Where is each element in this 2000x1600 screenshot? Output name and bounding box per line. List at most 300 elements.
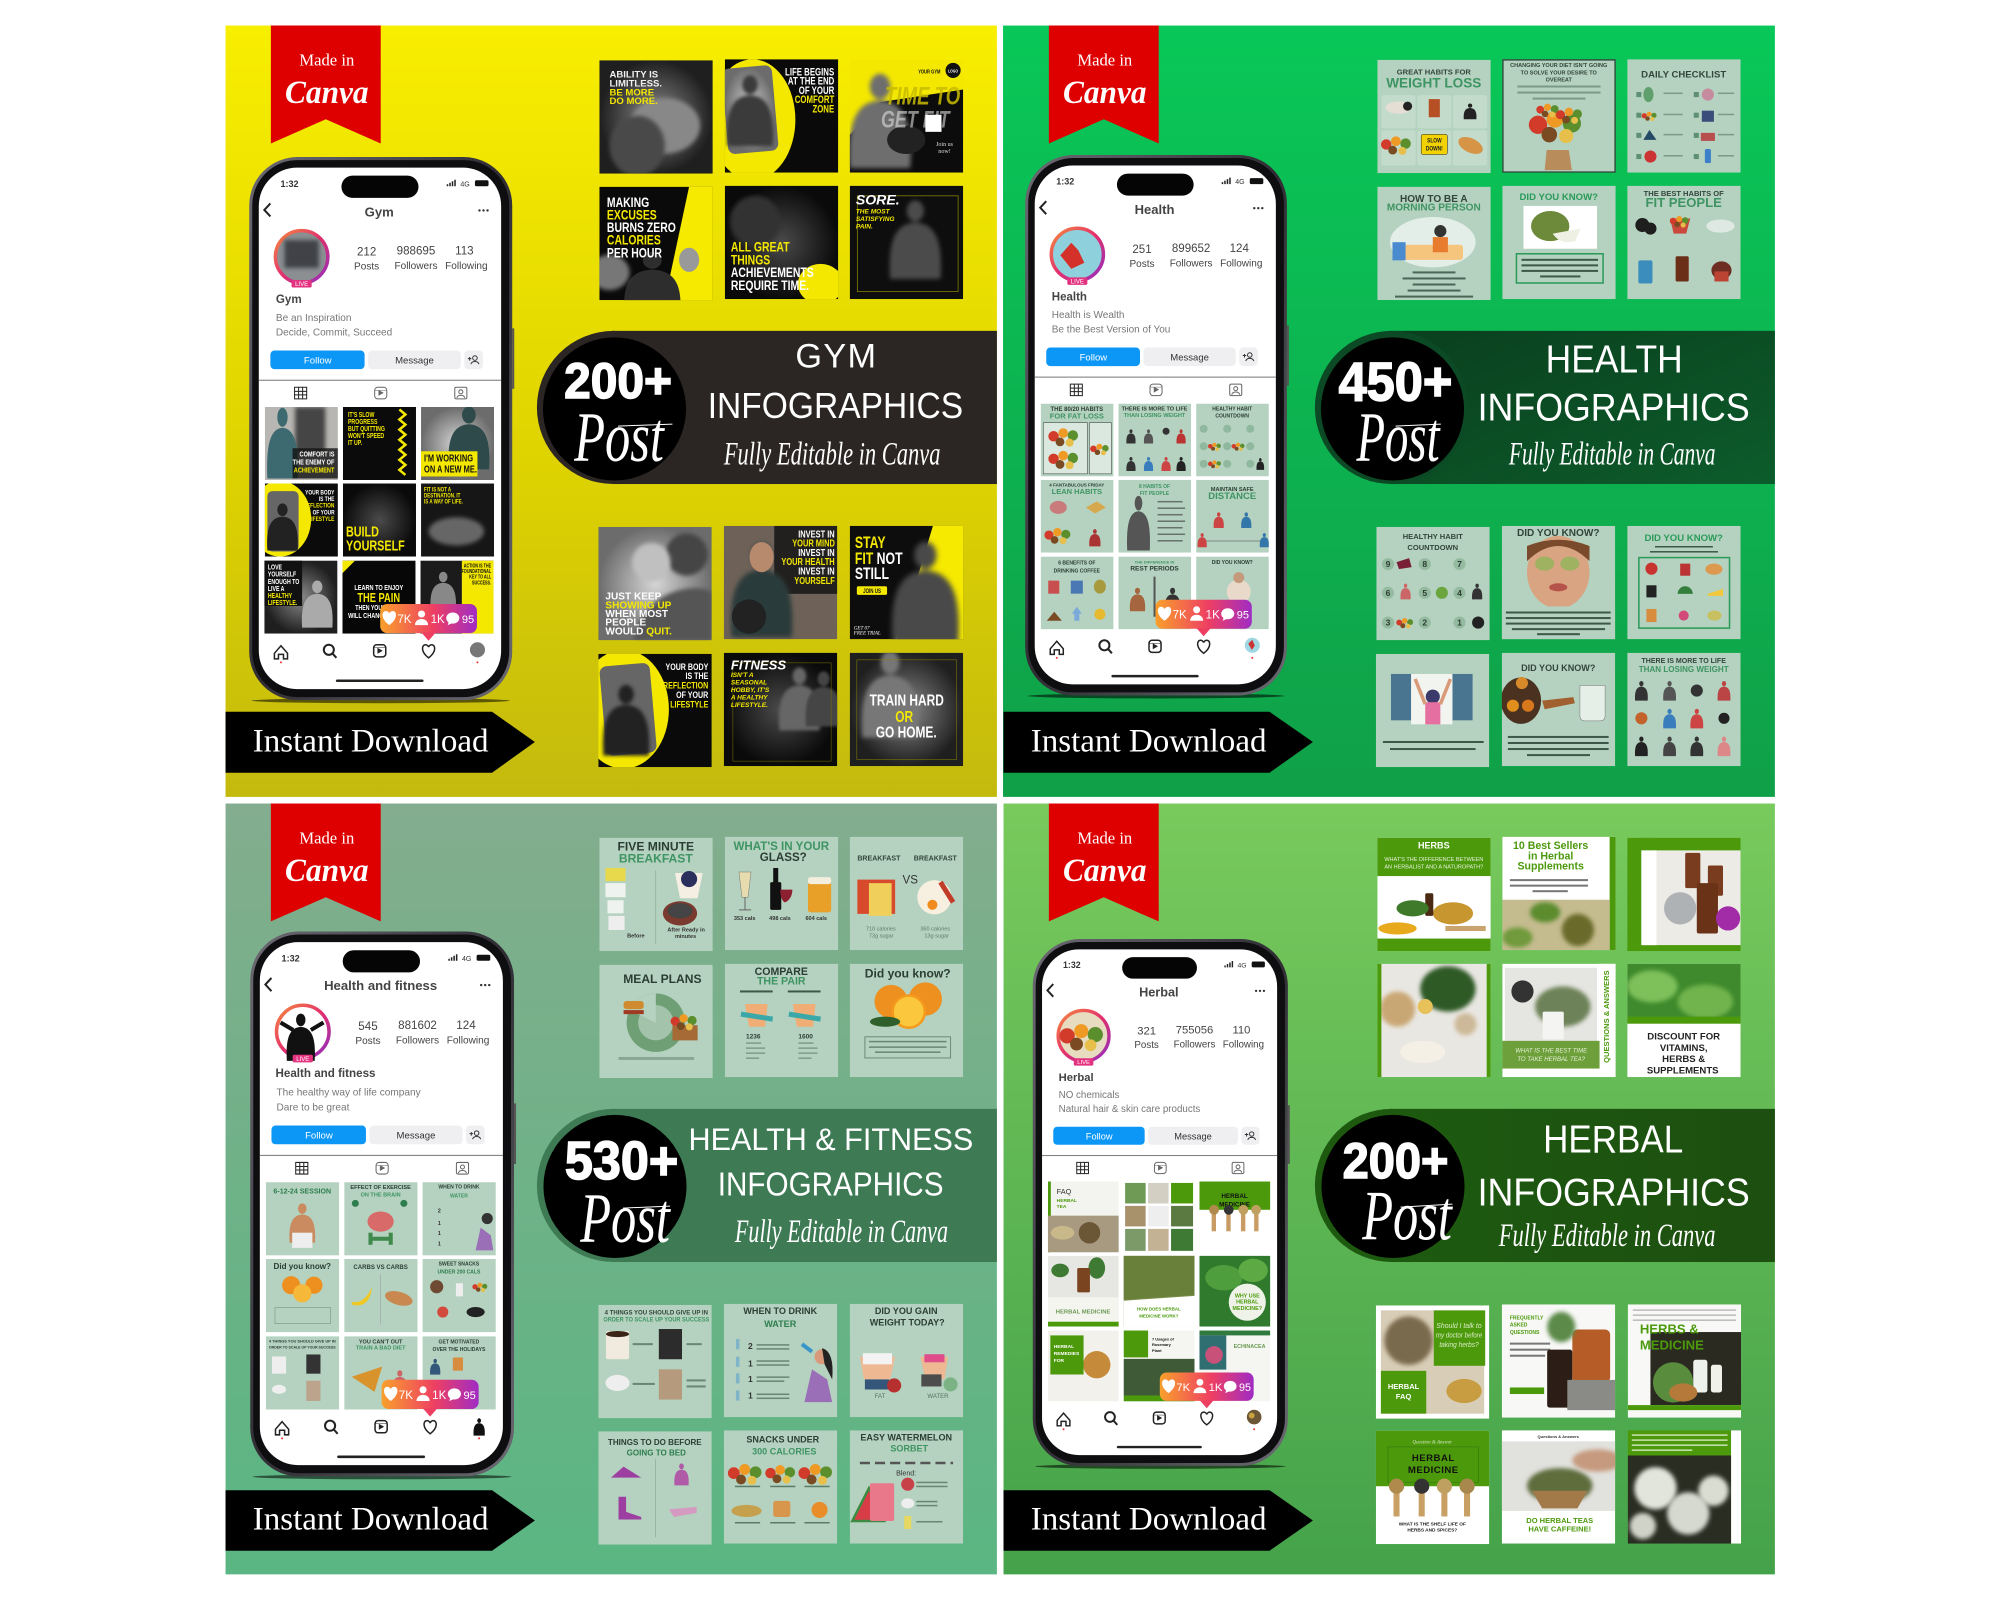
post: breakfast vs breakfast: VS: [903, 875, 918, 887]
post: herbs naturopath: WHAT'S THE DIFFERENCE BETWEEN: [1384, 857, 1483, 863]
ribbon: made in canva: [1049, 804, 1159, 921]
post: whats in your glass: GLASS?: [760, 852, 807, 864]
post count: Post: [1356, 399, 1441, 477]
post count: Post: [580, 1180, 671, 1258]
post grid: Did you know?: [274, 1262, 331, 1271]
post: invest in: INVEST IN: [798, 547, 835, 558]
post: 4 things: 4 THINGS YOU SHOULD GIVE UP IN: [605, 1310, 708, 1316]
post: just keep showing up: SHOWING UP: [605, 600, 672, 611]
post: when to drink water: WHEN TO DRINK: [743, 1306, 818, 1316]
post: discount: [1627, 964, 1741, 1077]
post: stay fit not still: FIT NOT: [855, 550, 903, 569]
post: waking up early: [1376, 654, 1489, 767]
post grid: [1048, 1181, 1270, 1401]
profile buttons: Message: [397, 1131, 435, 1142]
avatar: [277, 1005, 329, 1063]
arrow: instant download: [226, 712, 535, 773]
post: when to drink water: [724, 1304, 837, 1417]
post: questions and answers: WHAT IS THE BEST TIME: [1515, 1048, 1588, 1054]
post grid: COUNTDOWN: [1215, 414, 1249, 420]
post: making excuses: BURNS ZERO: [607, 220, 676, 236]
profile nav avatar: [1245, 638, 1260, 653]
post grid: LEAN HABITS: [1052, 487, 1102, 496]
panel background: [226, 804, 997, 1574]
post: did you gain weight: FAT: [875, 1394, 886, 1400]
post: invest in: INVEST IN: [798, 528, 835, 540]
profile stats: [1129, 243, 1262, 270]
ribbon: made in canva: Made in: [1077, 828, 1133, 847]
post: things to do before bed: GOING TO BED: [627, 1448, 686, 1457]
profile buttons: Message: [1174, 1131, 1212, 1141]
notification bubble: [1156, 600, 1252, 636]
post: herbal medicine spoons: Question & Answer: [1413, 1440, 1452, 1445]
profile buttons: Message: [1170, 353, 1209, 364]
post: discount: HERBS &: [1662, 1054, 1705, 1065]
profile bio: Be the Best Version of You: [1052, 324, 1170, 335]
banner title: Fully Editable in Canva: [1508, 435, 1715, 472]
post grid: IT UP.: [348, 440, 362, 448]
post: life begins: [724, 59, 838, 173]
post: did you gain weight: DID YOU GAIN: [875, 1306, 938, 1316]
post: changing your diet: TO SOLVE YOUR DESIRE TO: [1521, 70, 1598, 76]
profile bio: Health: [1052, 291, 1087, 303]
post: just keep showing up: WHEN MOST: [605, 609, 669, 620]
post grid: BUT QUITTING: [348, 425, 385, 433]
post: all great things: REQUIRE TIME.: [731, 278, 809, 293]
profile stats: Followers: [394, 261, 438, 272]
post: things to do before bed: THINGS TO DO BEFORE: [608, 1438, 702, 1447]
notification bubble: 95: [1239, 1382, 1251, 1394]
post grid: [266, 1182, 496, 1410]
panel background: [1004, 804, 1775, 1574]
post: time to get fit: TIME TO: [885, 82, 960, 110]
post grid: MAINTAIN SAFE: [1211, 487, 1254, 493]
post: time to get fit: [849, 59, 963, 173]
post: 10 best sellers: Supplements: [1517, 861, 1584, 873]
post: stay fit not still: STILL: [855, 566, 889, 584]
profile stats: Following: [445, 261, 488, 272]
profile stats: Following: [447, 1036, 489, 1047]
post grid: IS THE: [319, 497, 335, 503]
post: all great things: ALL GREAT: [731, 239, 790, 255]
post grid: KEY TO ALL: [469, 574, 491, 580]
post: your body: OF YOUR: [676, 689, 708, 700]
phone mockup: health profile: [1025, 155, 1289, 698]
post grid: DISTANCE: [1208, 491, 1256, 502]
post: healthy habit countdown: 5: [1422, 588, 1427, 598]
post grid: DID YOU KNOW?: [1212, 560, 1253, 566]
post: making excuses: [599, 186, 713, 300]
post: 10 best sellers: 10 Best Sellers: [1513, 840, 1588, 852]
post grid: 6-12-24 SESSION: [273, 1188, 331, 1195]
post: herbal faq: HERBAL: [1388, 1382, 1420, 1391]
banner title: INFOGRAPHICS: [1478, 1171, 1750, 1215]
profile bio: Gym: [276, 294, 302, 306]
banner title: INFOGRAPHICS: [708, 385, 963, 426]
profile buttons: [304, 356, 434, 367]
post: train hard: TRAIN HARD: [870, 692, 944, 710]
post: frequently asked questions: QUESTIONS: [1510, 1330, 1540, 1336]
post: discount: DISCOUNT FOR: [1647, 1031, 1720, 1042]
post: healthy habit countdown: 3: [1386, 618, 1391, 628]
profile stats: Posts: [354, 261, 379, 272]
post: 10 best sellers: [1502, 837, 1616, 950]
post: healthy habit countdown: [1376, 527, 1490, 640]
post: morning person: [1377, 187, 1491, 300]
post grid: I'M WORKING: [424, 452, 473, 464]
panel background: [1003, 26, 1775, 797]
post grid: CARBS VS CARBS: [353, 1265, 408, 1271]
post grid: HOW DOES HERBAL: [1137, 1306, 1181, 1311]
ribbon: made in canva: [271, 804, 381, 921]
post: healthy habit countdown: 4: [1457, 588, 1462, 598]
post grid: LIFESTYLE: [308, 516, 335, 523]
post: great habits for weight loss: GREAT HABITS FOR: [1397, 67, 1471, 76]
banner title: Fully Editable in Canva: [734, 1213, 948, 1250]
ribbon: made in canva: [1049, 26, 1159, 143]
post: breakfast vs breakfast: 13g sugar: [924, 934, 949, 940]
post grid: ECHINACEA: [1234, 1344, 1266, 1350]
post count: [564, 352, 672, 477]
post grid: FOR FAT LOSS: [1050, 412, 1104, 421]
profile buttons: [1086, 1131, 1212, 1141]
post: herbs naturopath: HERBS: [1418, 840, 1450, 850]
phone mockup: health profile: 1:32: [1056, 177, 1074, 187]
post: five minute breakfast: minutes: [675, 934, 696, 940]
post: questions and answers: TO TAKE HERBAL TEA?: [1517, 1057, 1586, 1063]
profile stats: 321: [1137, 1025, 1156, 1037]
post: 4 things: ORDER TO SCALE UP YOUR SUCCESS: [603, 1317, 709, 1323]
profile stats: Followers: [1170, 258, 1213, 269]
post: your body: [598, 654, 712, 768]
post: healthy habit countdown: 7: [1457, 559, 1462, 569]
post: five minute breakfast: Before: [627, 934, 645, 940]
profile stats: [1134, 1024, 1264, 1051]
profile bio: [276, 294, 392, 338]
post: herbs naturopath: [1377, 838, 1491, 951]
post: great habits for weight loss: [1377, 60, 1491, 173]
profile stats: 124: [456, 1019, 476, 1032]
post grid: SWEET SNACKS: [439, 1262, 480, 1268]
post: discount: SUPPLEMENTS: [1647, 1066, 1719, 1077]
profile bio: NO chemicals: [1059, 1090, 1120, 1101]
phone mockup: gym profile: 4G: [460, 181, 470, 188]
post grid: THE 80/20 HABITS: [1050, 407, 1103, 413]
banner title: [708, 338, 963, 472]
post: best habits of fit people: FIT PEOPLE: [1646, 195, 1722, 210]
profile stats: 113: [455, 245, 474, 257]
profile stats: Following: [1220, 258, 1262, 269]
post: watermelon sorbet: EASY WATERMELON: [860, 1432, 952, 1442]
post: life begins: ZONE: [812, 104, 834, 115]
profile stats: Followers: [1174, 1040, 1216, 1051]
profile buttons: Follow: [304, 356, 332, 367]
avatar: LIVE: [296, 1057, 309, 1063]
post: your body: REFLECTION: [663, 679, 708, 691]
phone mockup: herbal profile: Herbal: [1139, 986, 1179, 1000]
post: changing your diet: [1502, 59, 1616, 173]
avatar: LIVE: [1077, 1060, 1090, 1066]
post: watermelon sorbet: SORBET: [890, 1443, 929, 1453]
post: daily checklist: [1627, 59, 1741, 173]
post grid: LIFESTYLE.: [268, 599, 298, 607]
ribbon: made in canva: Made in: [299, 828, 355, 847]
post: questions and answers: QUESTIONS & ANSWERS: [1602, 970, 1611, 1063]
post grid: 4 THINGS YOU SHOULD GIVE UP IN: [269, 1339, 336, 1343]
phone mockup: gym profile: Gym: [365, 204, 394, 219]
panel: health infographics: [1003, 26, 1775, 797]
post: life begins: OF YOUR: [799, 85, 834, 96]
post grid: WILL CHANGE: [348, 612, 388, 620]
post grid: IT'S SLOW: [348, 411, 375, 419]
post: watermelon sorbet: Blend:: [896, 1471, 916, 1478]
post: healthy habit countdown: COUNTDOWN: [1407, 543, 1458, 552]
post grid: 8 HABITS OF: [1139, 484, 1170, 490]
post: making excuses: CALORIES: [607, 232, 661, 248]
profile stats: 988695: [397, 245, 435, 257]
post grid: WON'T SPEED: [348, 432, 385, 440]
post grid: THE ENEMY OF: [293, 459, 334, 467]
profile bio: Health and fitness: [275, 1067, 375, 1080]
profile stats: [355, 1019, 489, 1047]
post: whats in your glass: 353 cals: [734, 916, 755, 922]
post grid: ACTION IS THE: [464, 563, 491, 569]
banner: 530+ post health and fitness infographics: [537, 1109, 997, 1262]
profile stats: 899652: [1172, 243, 1210, 255]
post: your body: IS THE: [686, 670, 709, 681]
post: fitness: [724, 653, 842, 766]
post: herbal medicine spoons: MEDICINE: [1408, 1465, 1459, 1476]
post: when to drink water: 2: [748, 1341, 753, 1351]
post: breakfast vs breakfast: 73g sugar: [869, 934, 894, 940]
post: when to drink water: 1: [748, 1358, 753, 1368]
banner title: [689, 1122, 973, 1250]
post: sore: THE MOST: [856, 208, 891, 215]
post: compare the pair: [725, 964, 838, 1077]
post grid: Plant: [1152, 1348, 1162, 1353]
post: fitness: HOBBY, IT'S: [731, 687, 770, 694]
ribbon: made in canva: Canva: [1063, 852, 1147, 889]
post: questions and answers: [1502, 964, 1616, 1077]
post grid: THERE IS MORE TO LIFE: [1122, 407, 1188, 413]
post: time to get fit: YOUR GYM: [918, 69, 940, 76]
avatar: [1058, 1010, 1109, 1066]
post grid: 1: [438, 1221, 441, 1227]
post: did you know health foods: [1627, 526, 1741, 639]
ribbon: made in canva: Made in: [299, 50, 355, 69]
post: invest in: YOURSELF: [794, 575, 835, 586]
profile bio: Be an Inspiration: [276, 313, 351, 324]
post grid: HEALTHY: [268, 592, 293, 600]
phone mockup: gym profile: 1:32: [280, 179, 299, 189]
post: time to get fit: GET FIT: [881, 106, 951, 133]
profile buttons: Follow: [1086, 1131, 1113, 1141]
post grid: PROGRESS: [348, 418, 377, 426]
post grid: LIVE A: [268, 585, 285, 593]
post: compare the pair: COMPARE: [755, 966, 808, 978]
post: train hard: GO HOME.: [876, 724, 937, 742]
profile stats: 251: [1132, 244, 1152, 256]
post: did you know soursop: [1502, 186, 1616, 299]
post grid: DRINKING COFFEE: [1054, 569, 1101, 575]
post: compare the pair: 1236: [746, 1033, 761, 1040]
post grid: ORDER TO SCALE UP YOUR SUCCESS: [269, 1345, 336, 1349]
post grid: 1: [438, 1231, 441, 1237]
post grid: WATER: [450, 1193, 468, 1199]
post: ability is limitless: LIMITLESS.: [609, 79, 662, 90]
post count: Post: [573, 399, 665, 477]
banner: 450+ post health infographics: [1315, 331, 1775, 484]
post: essential oils: [1627, 838, 1741, 951]
phone mockup: herbal profile: 4G: [1238, 962, 1247, 969]
post: life begins: LIFE BEGINS: [785, 66, 834, 78]
post: discount: VITAMINS,: [1660, 1043, 1708, 1054]
post: great habits for weight loss: DOWN!: [1426, 146, 1443, 153]
post: did you know cinnamon: [1501, 653, 1615, 766]
banner: 200+ post herbal infographics: [1315, 1109, 1775, 1262]
panel: herbal infographics: [1004, 804, 1775, 1574]
banner title: [1478, 338, 1750, 472]
post: stay fit not still: GET 07: [854, 627, 870, 632]
post grid: REST PERIODS: [1130, 566, 1179, 573]
post grid: YOUR BODY: [305, 490, 335, 497]
panel: gym infographics: [226, 26, 997, 797]
post: healthy habit countdown: HEALTHY HABIT: [1403, 532, 1463, 541]
banner title: INFOGRAPHICS: [718, 1167, 943, 1204]
profile stats: 881602: [398, 1019, 437, 1032]
post: whats in your glass: 604 cals: [805, 916, 827, 922]
post: breakfast vs breakfast: [850, 837, 963, 950]
post: fitness: LIFESTYLE.: [731, 702, 768, 709]
notification bubble: 1K: [432, 1389, 447, 1402]
profile bio: Herbal: [1059, 1072, 1094, 1084]
profile stats: Posts: [1129, 259, 1155, 270]
post: herbal medicine spoons: WHAT IS THE SHELF LIFE OF: [1399, 1522, 1466, 1528]
post: invest in: INVEST IN: [798, 566, 835, 577]
post: daily checklist: DAILY CHECKLIST: [1641, 69, 1726, 80]
profile bio: [1052, 291, 1170, 335]
arrow: instant download: Instant Download: [253, 723, 489, 760]
post: fitness: A HEALTHY: [730, 695, 768, 702]
post grid: IS A WAY OF LIFE.: [424, 499, 463, 506]
notification bubble: [1160, 1373, 1254, 1408]
banner title: HERBAL: [1543, 1118, 1683, 1162]
post: did you know cinnamon: DID YOU KNOW?: [1521, 663, 1595, 673]
post grid: HERBAL: [1221, 1193, 1248, 1200]
post grid: LEARN TO ENJOY: [354, 584, 404, 592]
post grid: THE DIFFERENCE IN: [1135, 560, 1175, 565]
post grid: LOVE: [268, 564, 282, 572]
post count: [1343, 1132, 1453, 1255]
post: when to drink water: 1: [748, 1374, 753, 1384]
ribbon: made in canva: [271, 26, 381, 143]
avatar: [275, 231, 328, 288]
post: meal plans: [599, 965, 713, 1078]
banner title: INFOGRAPHICS: [1478, 386, 1750, 430]
post: ability is limitless: [599, 60, 713, 176]
post: herbs and medicine: MEDICINE: [1640, 1338, 1704, 1353]
post: herbs and medicine: [1628, 1304, 1741, 1418]
post: frequently asked questions: FREQUENTLY: [1510, 1315, 1544, 1321]
notification bubble: 1K: [1209, 1382, 1223, 1394]
arrow: instant download: [1004, 712, 1313, 773]
post grid: TRAIN A BAD DIET: [356, 1345, 406, 1351]
post count: Post: [1362, 1177, 1453, 1255]
post count: [1339, 351, 1452, 477]
post count: 450+: [1339, 351, 1452, 412]
post: more to life: THERE IS MORE TO LIFE: [1641, 658, 1726, 665]
post count: [565, 1132, 678, 1258]
post: making excuses: PER HOUR: [607, 245, 662, 261]
post grid: HERBAL MEDICINE: [1056, 1309, 1110, 1315]
post: stay fit not still: [850, 526, 963, 644]
post grid: MEDICINE?: [1233, 1306, 1262, 1312]
profile buttons: [1080, 353, 1209, 364]
phone mockup: health and fitness profile: 1:32: [282, 953, 300, 963]
post grid: 1: [438, 1241, 441, 1247]
post grid: BUILD: [346, 523, 379, 540]
profile bio: [275, 1067, 422, 1113]
post: time to get fit: LOGO: [948, 68, 958, 74]
post grid: ENOUGH TO: [268, 578, 299, 586]
post grid: 6 BENEFITS OF: [1058, 561, 1095, 567]
post: ability is limitless: BE MORE: [609, 88, 654, 99]
post: did you gain weight: WATER: [927, 1394, 949, 1400]
arrow: instant download: Instant Download: [1031, 1501, 1267, 1538]
post: stay fit not still: FREE TRIAL: [853, 632, 881, 637]
post grid: REMEDIES: [1054, 1351, 1080, 1357]
post: more to life: [1627, 653, 1741, 766]
post: compare the pair: THE PAIR: [757, 975, 806, 987]
post: morning person: HOW TO BE A: [1400, 194, 1468, 205]
post: just keep showing up: [598, 527, 712, 640]
post: do herbal teas have caffeine: HAVE CAFFEINE!: [1528, 1525, 1591, 1534]
post grid: MEDICINE: [1219, 1201, 1250, 1208]
post grid: OVER THE HOLIDAYS: [433, 1347, 486, 1353]
ribbon: made in canva: Canva: [1063, 74, 1147, 111]
profile stats: [354, 245, 488, 272]
post: herbal faq: FAQ: [1396, 1392, 1411, 1401]
post: did you know face: DID YOU KNOW?: [1517, 528, 1600, 539]
arrow: instant download: [226, 1490, 535, 1551]
post: five minute breakfast: After Ready in: [667, 927, 706, 933]
notification bubble: 95: [1237, 610, 1249, 622]
notification bubble: [382, 1380, 479, 1417]
post: snacks under 300 calories: SNACKS UNDER: [746, 1434, 820, 1444]
phone mockup: herbal profile: 1:32: [1063, 960, 1081, 970]
profile stats: Followers: [396, 1036, 439, 1047]
avatar: [1051, 228, 1103, 285]
post grid: Rosemary: [1152, 1342, 1172, 1347]
post: whats in your glass: [725, 837, 838, 950]
post grid: ON A NEW ME.: [424, 463, 477, 475]
post grid: EFFECT OF EXERCISE: [350, 1185, 411, 1191]
post: all great things: [725, 186, 843, 304]
notification bubble: 95: [463, 1390, 476, 1402]
post: sore: [850, 186, 963, 299]
post: five minute breakfast: [599, 838, 713, 951]
post: snacks under 300 calories: 300 CALORIES: [752, 1446, 816, 1456]
post: did you gain weight: WEIGHT TODAY?: [870, 1317, 945, 1327]
profile stats: 110: [1232, 1024, 1250, 1036]
post: do herbal teas have caffeine: DO HERBAL TEAS: [1526, 1516, 1593, 1525]
post: 10 best sellers: in Herbal: [1528, 850, 1573, 862]
phone mockup: herbal profile: [1033, 939, 1290, 1469]
post: just keep showing up: JUST KEEP: [605, 591, 662, 602]
post: healthy habit countdown: 8: [1422, 559, 1427, 569]
notification bubble: 7K: [397, 614, 412, 626]
post grid: OF YOUR: [313, 510, 335, 517]
